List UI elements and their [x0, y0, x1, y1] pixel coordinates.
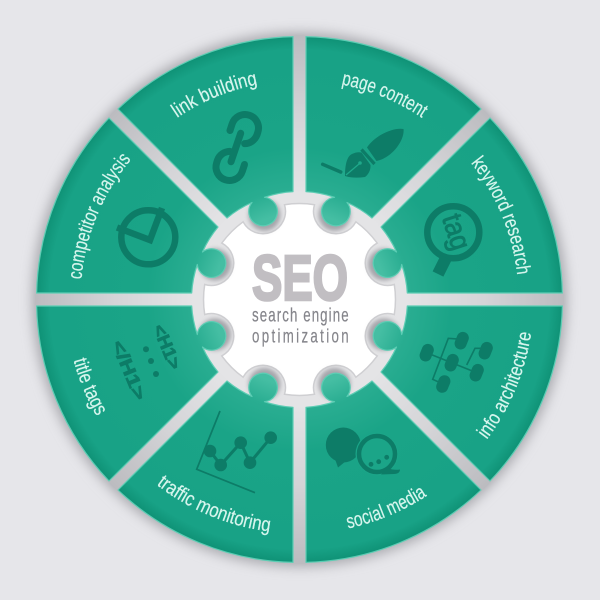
icon: fountain pen [323, 129, 404, 178]
segment: title tags [37, 306, 226, 481]
icon: site hierarchy [418, 330, 495, 395]
icon: magnifier with tag [427, 206, 479, 274]
segment: link building [118, 37, 293, 226]
icon: chain link [212, 111, 262, 184]
label: page content: page content [341, 74, 428, 118]
icon: magnifier with tag: tag [435, 210, 477, 254]
label: traffic monitoring: traffic monitoring [158, 475, 270, 536]
label: title tags: title tags [74, 357, 105, 415]
gear white face [204, 204, 395, 395]
segments with puzzle knobs [37, 37, 562, 562]
icon: pie chart [117, 208, 175, 264]
subtitle: search engine: search engine [252, 305, 349, 326]
segment: social media [306, 373, 481, 562]
wheel drop shadow [32, 32, 566, 566]
socket shading [199, 199, 400, 400]
segment: competitor analysis [37, 118, 226, 293]
segment: page content [306, 37, 481, 226]
silver wheel base [36, 36, 563, 563]
label: info architecture: info architecture [476, 332, 531, 439]
label: social media: social media [346, 488, 428, 528]
central gear [199, 199, 400, 400]
label: competitor analysis: competitor analysis [71, 154, 130, 278]
icon: H1 title tags: </H1> [108, 337, 150, 403]
segment: keyword research [373, 118, 562, 293]
title: SEO: SEO [252, 242, 348, 314]
segment: traffic monitoring [118, 373, 293, 562]
icon: H1 title tags [108, 321, 185, 403]
label: link building: link building [170, 74, 257, 118]
label: keyword research: keyword research [471, 154, 531, 274]
icon: speech bubbles [326, 428, 400, 476]
segment: info architecture [373, 306, 562, 481]
icon: line chart [197, 411, 277, 493]
subtitle: optimization: optimization [252, 326, 349, 347]
icon: H1 title tags: <H1> [149, 321, 185, 372]
